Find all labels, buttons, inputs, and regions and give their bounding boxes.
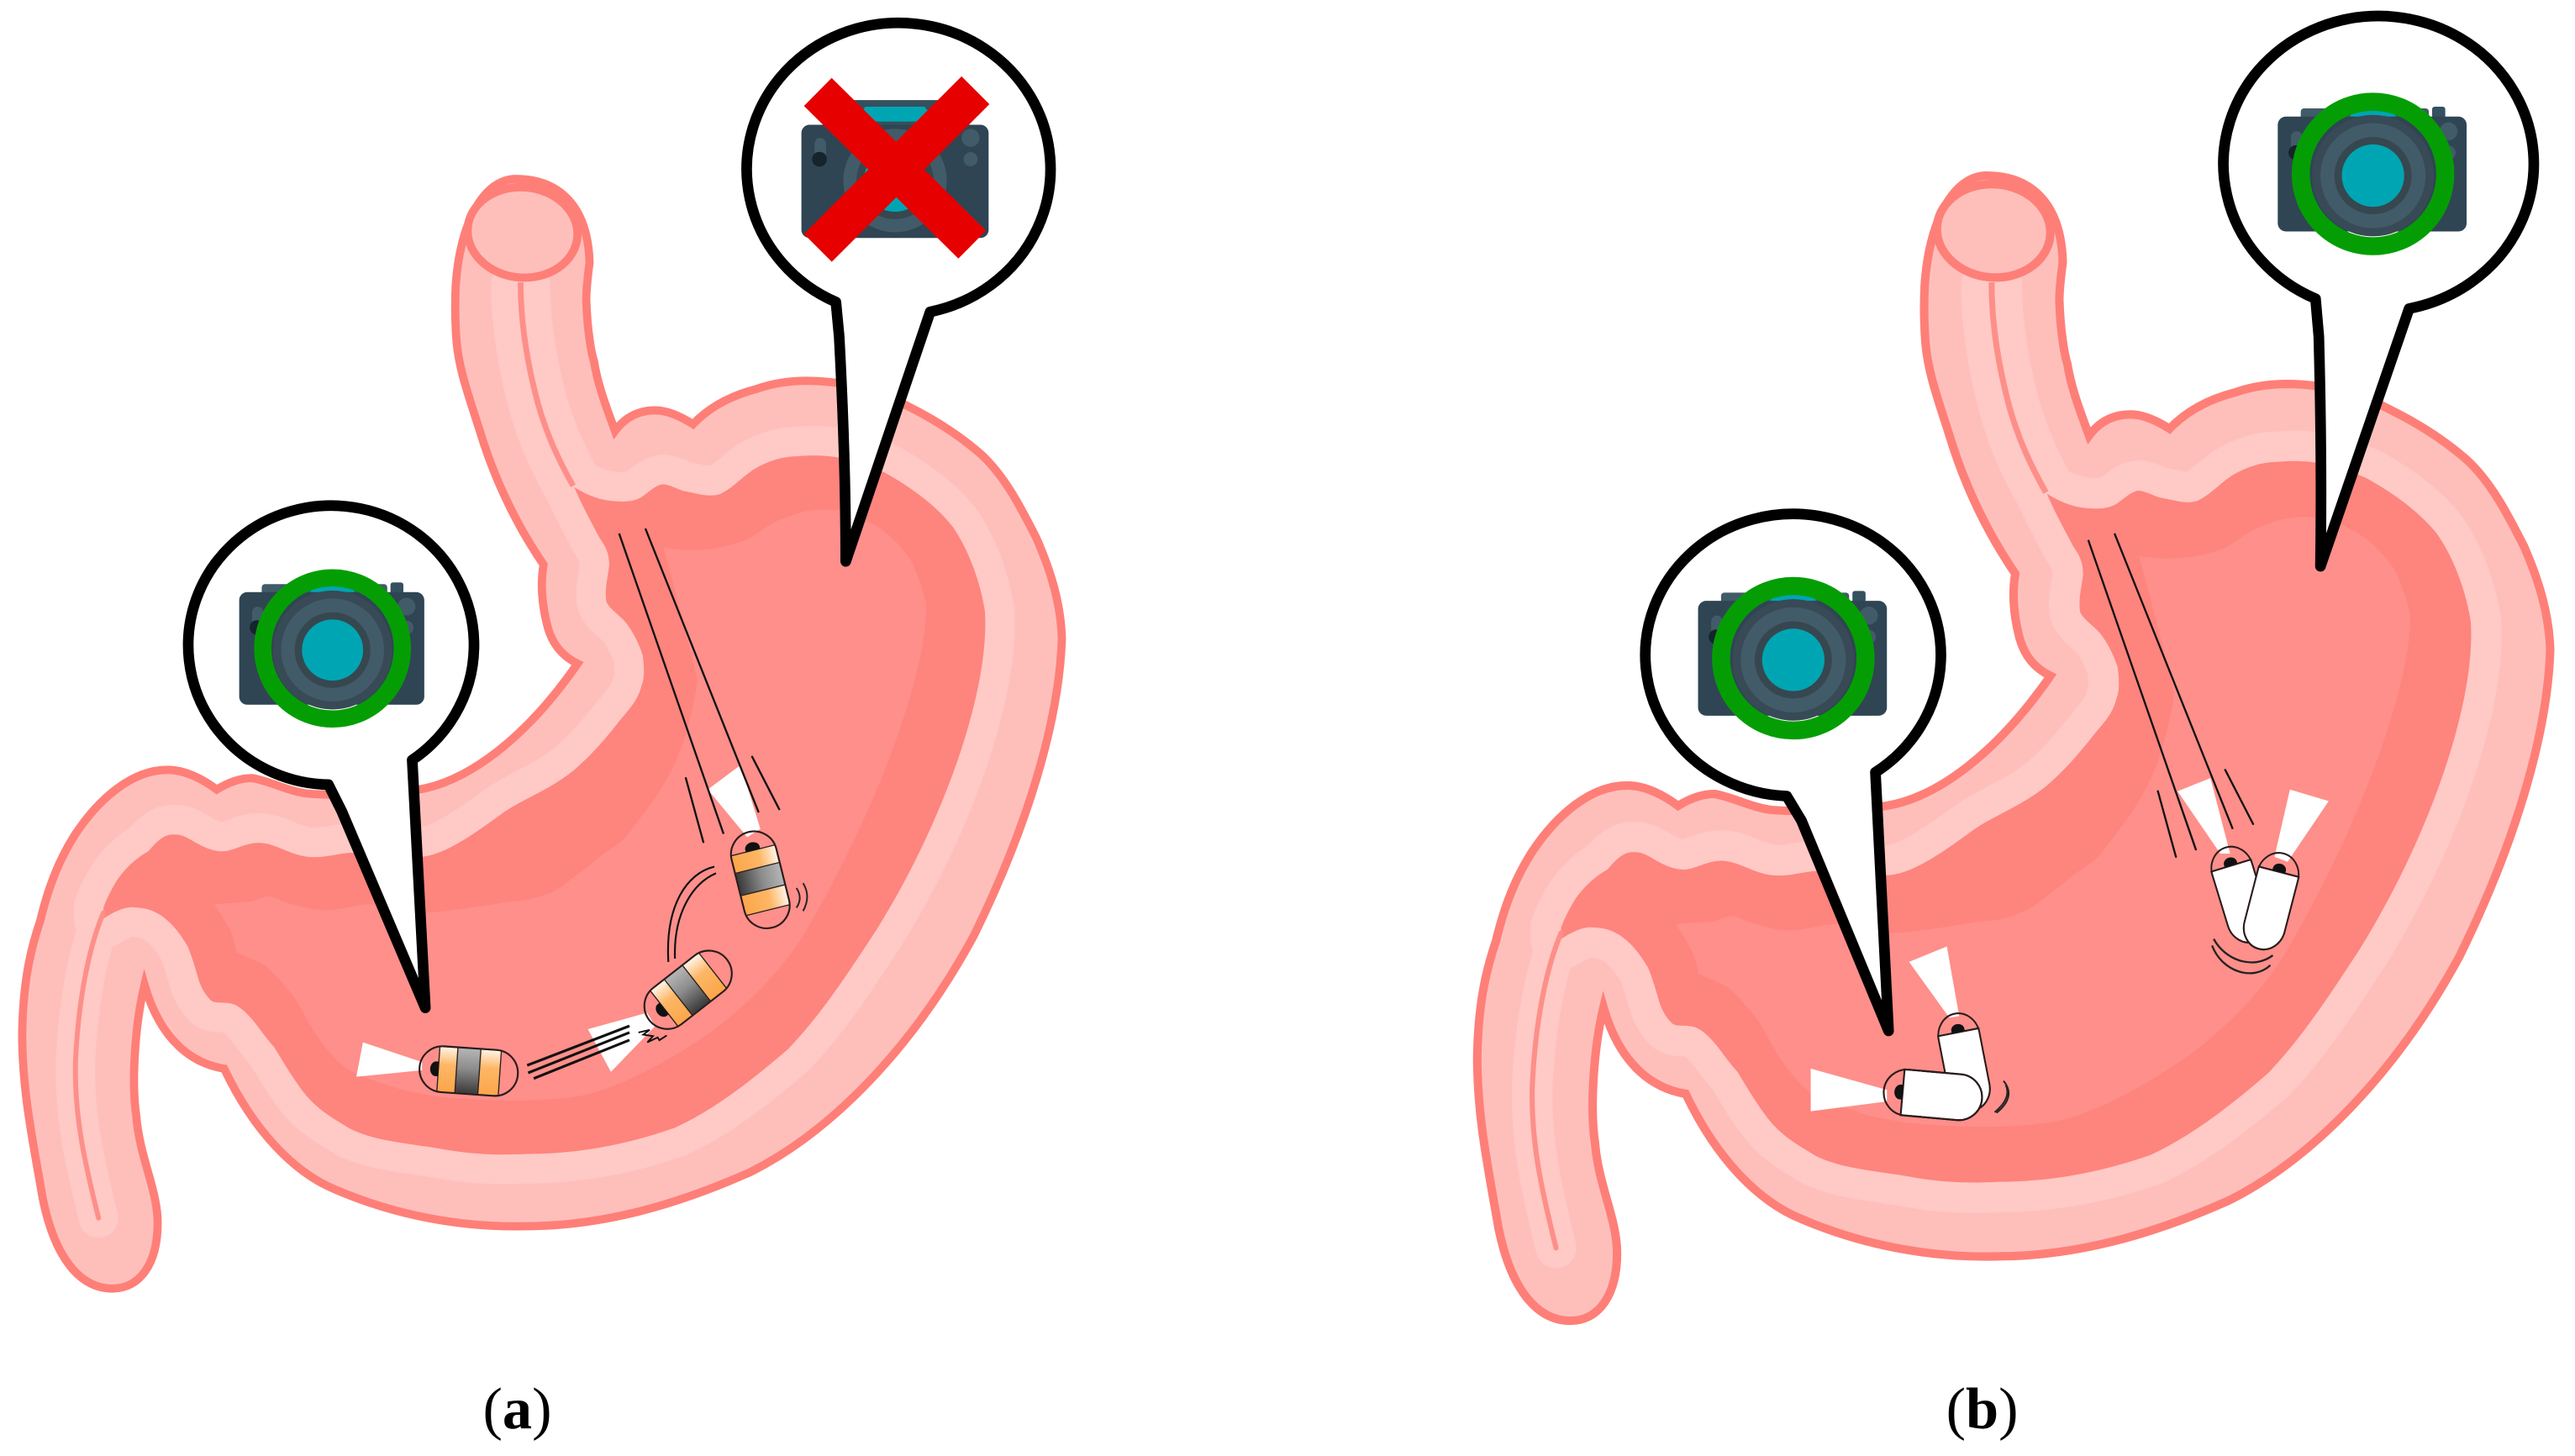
light beam: resting capsule — [356, 1043, 422, 1077]
light beam: right falling capsule — [2274, 790, 2329, 862]
esophagus inner line — [520, 282, 573, 486]
callout: bottom (a), image clear — [188, 506, 474, 1008]
label: (a): (a) — [483, 1376, 552, 1442]
tube highlight stripes — [76, 286, 573, 1218]
balloon — [1646, 514, 1940, 1031]
long fall lines over beam — [2088, 534, 2233, 850]
icon: green ring — [1721, 586, 1866, 730]
wiggle lines (b) — [1994, 1081, 2009, 1113]
label: (b): (b) — [1946, 1376, 2019, 1442]
stomach lumen — [214, 509, 926, 1101]
balloon — [188, 506, 474, 1008]
light beam: falling capsule — [708, 765, 761, 837]
fall lines (a) — [686, 757, 779, 842]
callout: top (b), image clear — [2224, 16, 2534, 566]
bounce arcs — [668, 867, 716, 962]
impact arcs — [2212, 939, 2272, 973]
capsule: upright — [1935, 1010, 1993, 1114]
capsule: lying — [1882, 1068, 1984, 1122]
panel: stomach (a) — [22, 179, 1062, 1289]
icon: red cross — [818, 90, 976, 248]
icon: camera — [1698, 591, 1887, 721]
duodenum inner line — [76, 912, 103, 1218]
icon: green ring — [2301, 102, 2446, 246]
capsule: falling right — [2239, 849, 2304, 954]
impact lines — [527, 1026, 629, 1079]
stomach inner dark band — [103, 455, 985, 1154]
short fall lines (b) — [2158, 770, 2253, 857]
light beam: upright capsule — [1909, 947, 1959, 1017]
icon: camera — [2277, 107, 2467, 236]
light beam: left falling capsule — [2177, 778, 2230, 854]
long fall lines over beam — [619, 528, 759, 834]
capsule: falling — [726, 827, 794, 933]
wiggle lines — [797, 883, 807, 911]
impact spark — [639, 1030, 666, 1043]
capsule: resting — [418, 1044, 519, 1097]
balloon — [747, 23, 1051, 561]
esophagus opening — [464, 182, 582, 282]
capsule sequence (a) — [356, 528, 807, 1097]
stomach outer wall — [22, 179, 1062, 1289]
light beam: lying capsule — [1811, 1069, 1887, 1112]
capsule pair (b) — [1811, 534, 2329, 1122]
panel: stomach (b) — [1477, 176, 2550, 1321]
icon: green ring — [263, 578, 403, 719]
capsule: bouncing — [635, 941, 741, 1038]
balloon — [2224, 16, 2534, 566]
callout: top (a), image blocked — [747, 23, 1051, 561]
icon: camera — [802, 100, 988, 238]
icon: camera — [240, 582, 424, 710]
capsule: falling left — [2206, 842, 2274, 948]
light beam: bouncing capsule — [588, 1012, 656, 1072]
callout: bottom (b), image clear — [1646, 514, 1940, 1031]
